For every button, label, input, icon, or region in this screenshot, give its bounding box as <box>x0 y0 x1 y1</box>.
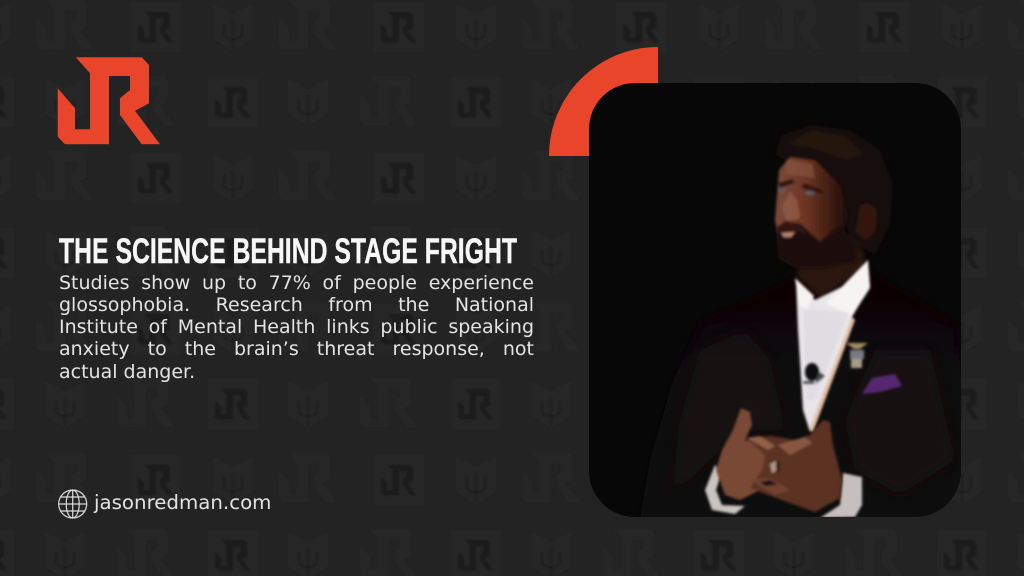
icon: globe <box>59 490 87 518</box>
text block: body paragraph: Studies show up to 77% of people experience <box>59 272 534 294</box>
face <box>775 157 877 255</box>
microphone <box>803 363 825 384</box>
pin <box>846 343 868 368</box>
website url: jasonredman.com <box>94 491 271 514</box>
text block: body paragraph: anxiety to the brain’s threat response, not <box>59 338 534 360</box>
neck <box>795 243 866 297</box>
cuffs <box>705 465 862 518</box>
text block: body paragraph: Institute of Mental Health links public speaking <box>59 316 534 338</box>
pocket square <box>862 374 902 394</box>
jacket sheen <box>680 334 947 486</box>
text block: body paragraph <box>59 272 534 383</box>
jacket <box>640 268 961 517</box>
hair <box>775 125 893 255</box>
hands <box>716 408 842 512</box>
shirt and collar <box>795 260 870 432</box>
panel: speaker photo <box>589 83 961 518</box>
text block: body paragraph: glossophobia. Research from the National <box>59 294 534 316</box>
text block: body paragraph: actual danger. <box>59 361 195 383</box>
beard <box>776 221 858 268</box>
accent: orange quarter arc <box>549 47 658 156</box>
logo: JR <box>58 57 160 144</box>
